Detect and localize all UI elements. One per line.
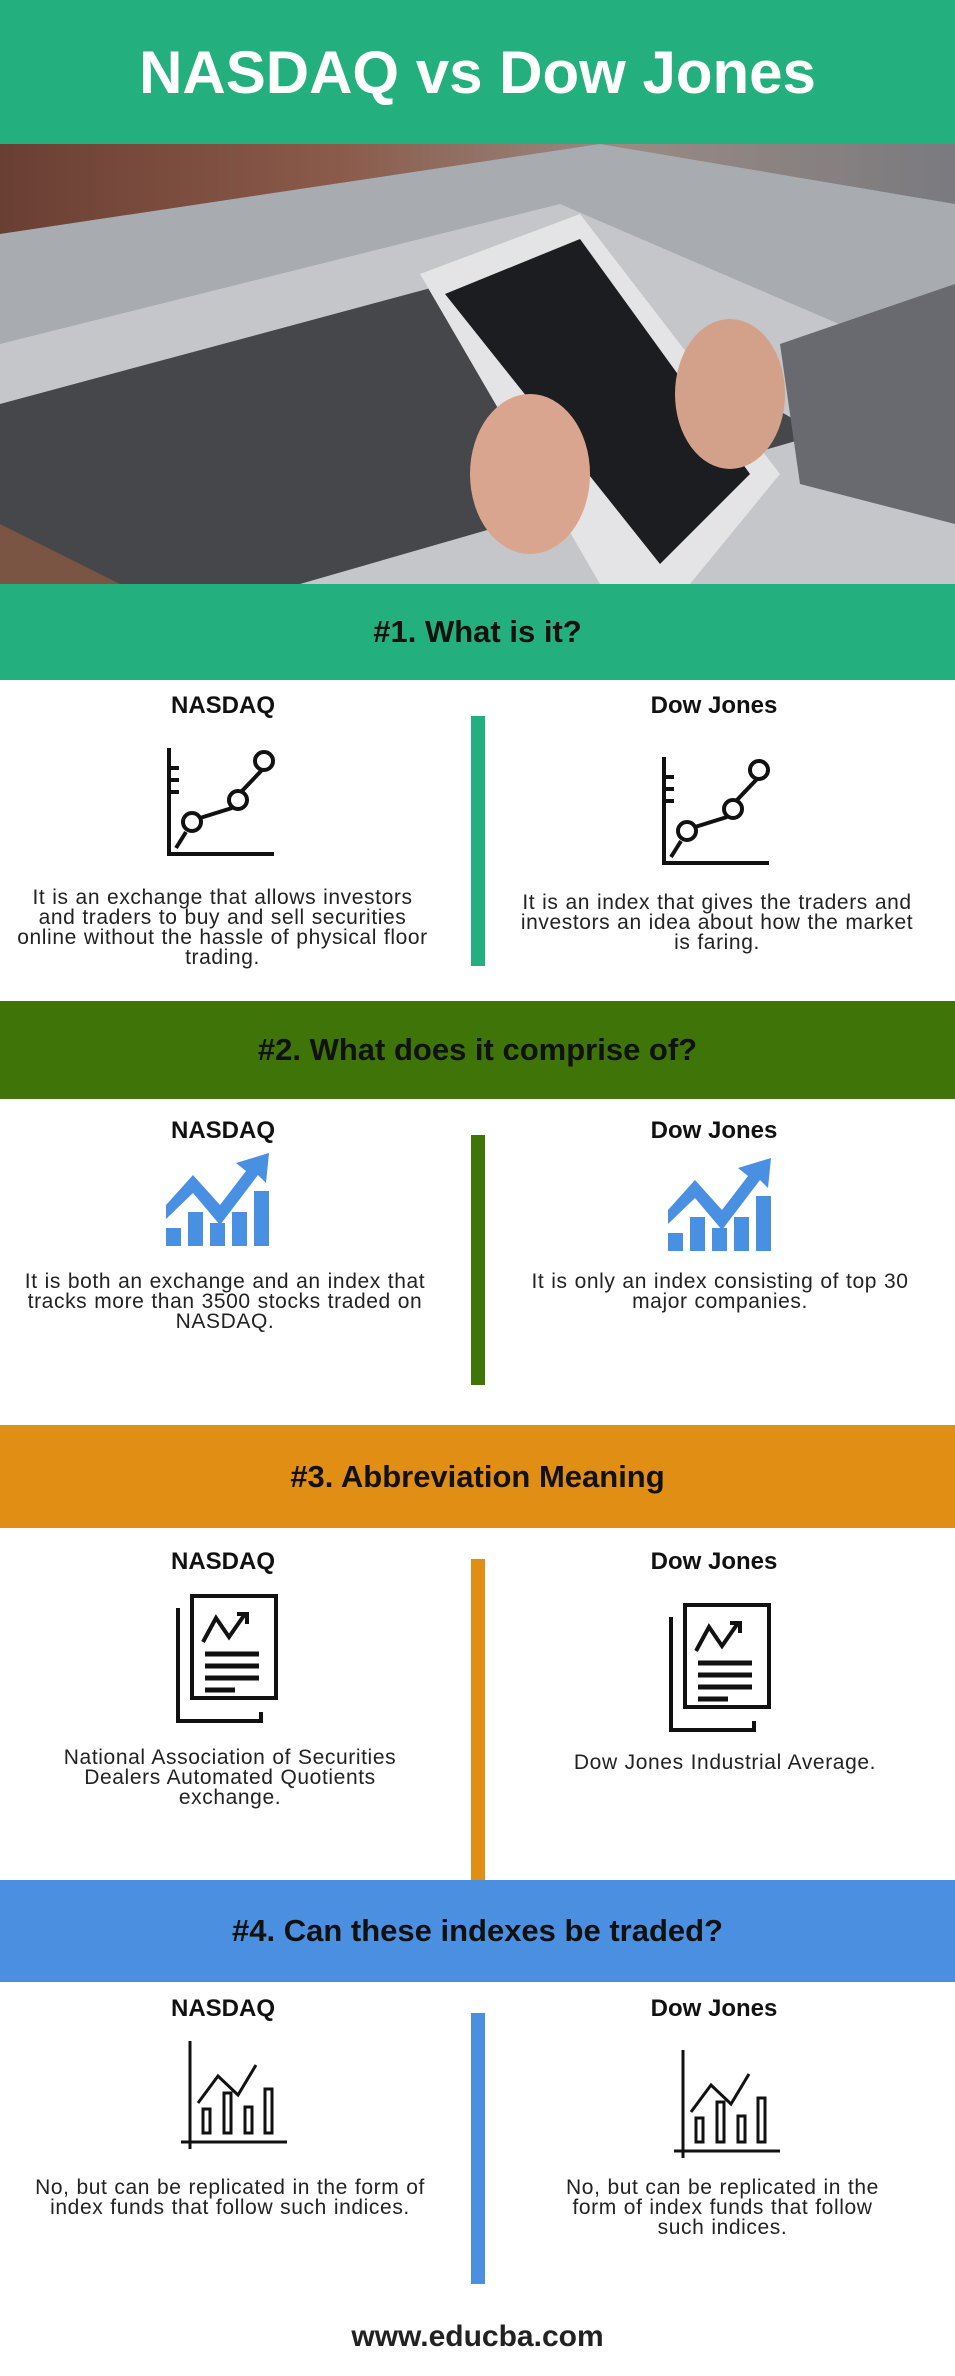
section 2 header xyxy=(0,1001,955,1099)
s4 right text: such indices. xyxy=(658,2216,787,2239)
s1 Dow Jones heading: Dow Jones xyxy=(651,692,777,719)
s4 Dow Jones heading: Dow Jones xyxy=(651,1995,777,2022)
icon: line chart right xyxy=(662,757,770,865)
s3 Dow Jones heading: Dow Jones xyxy=(651,1548,777,1575)
s2 Dow Jones heading: Dow Jones xyxy=(651,1117,777,1144)
s3 left text: Dealers Automated Quotients xyxy=(84,1766,376,1789)
s4 right text xyxy=(566,2176,879,2239)
s1 right text: It is an index that gives the traders and xyxy=(522,891,912,914)
s1 NASDAQ heading: NASDAQ xyxy=(171,692,275,719)
s2 left text: tracks more than 3500 stocks traded on xyxy=(28,1290,422,1313)
s1 left text: and traders to buy and sell securities xyxy=(39,906,406,929)
section 4 header xyxy=(0,1880,955,1982)
icon: blue growth chart left xyxy=(166,1153,269,1246)
section 1 header: #1. What is it? xyxy=(373,614,582,649)
s2 left text: NASDAQ. xyxy=(176,1310,274,1333)
photo: laptop and phone xyxy=(0,144,955,584)
s1 right text: investors an idea about how the market xyxy=(521,911,913,934)
s1 left text: trading. xyxy=(185,946,260,969)
s2 divider xyxy=(471,1135,485,1385)
s1 divider xyxy=(471,716,485,966)
s4 divider xyxy=(471,2013,485,2284)
icon: blue growth chart right xyxy=(668,1158,771,1251)
s4 right text: form of index funds that follow xyxy=(572,2196,873,2219)
s4 left text xyxy=(35,2176,425,2219)
footer url: www.educba.com xyxy=(351,2320,604,2353)
s2 right text: major companies. xyxy=(632,1290,808,1313)
s3 NASDAQ heading: NASDAQ xyxy=(171,1548,275,1575)
s3 right text: Dow Jones Industrial Average. xyxy=(574,1751,876,1774)
s3 divider xyxy=(471,1559,485,1880)
section 1 header xyxy=(0,584,955,680)
s2 NASDAQ heading: NASDAQ xyxy=(171,1117,275,1144)
section 2 header: #2. What does it comprise of? xyxy=(258,1032,697,1067)
s4 right text: No, but can be replicated in the xyxy=(566,2176,879,2199)
s1 right text xyxy=(521,891,913,954)
icon: bar line chart left xyxy=(181,2041,287,2149)
s2 right text xyxy=(531,1270,909,1313)
s4 NASDAQ heading: NASDAQ xyxy=(171,1995,275,2022)
s1 right text: is faring. xyxy=(674,931,760,954)
title bar: NASDAQ vs Dow Jones xyxy=(139,38,816,106)
icon: line chart left xyxy=(167,748,275,856)
s1 left text: It is an exchange that allows investors xyxy=(32,886,413,909)
s4 left text: No, but can be replicated in the form of xyxy=(35,2176,425,2199)
s3 left text xyxy=(64,1746,396,1809)
section 4 header: #4. Can these indexes be traded? xyxy=(232,1913,723,1948)
s1 left text xyxy=(17,886,428,969)
icon: report document right xyxy=(669,1603,771,1732)
section 3 header: #3. Abbreviation Meaning xyxy=(290,1458,665,1494)
s2 right text: It is only an index consisting of top 30 xyxy=(531,1270,909,1293)
title bar xyxy=(0,0,955,144)
icon: report document left xyxy=(176,1594,278,1723)
s2 left text: It is both an exchange and an index that xyxy=(25,1270,425,1293)
s4 left text: index funds that follow such indices. xyxy=(50,2196,410,2219)
s2 left text xyxy=(25,1270,425,1333)
s1 left text: online without the hassle of physical floor xyxy=(17,926,428,949)
s3 left text: National Association of Securities xyxy=(64,1746,396,1769)
s3 left text: exchange. xyxy=(179,1786,281,1809)
section 3 header xyxy=(0,1425,955,1528)
icon: bar line chart right xyxy=(674,2050,780,2158)
